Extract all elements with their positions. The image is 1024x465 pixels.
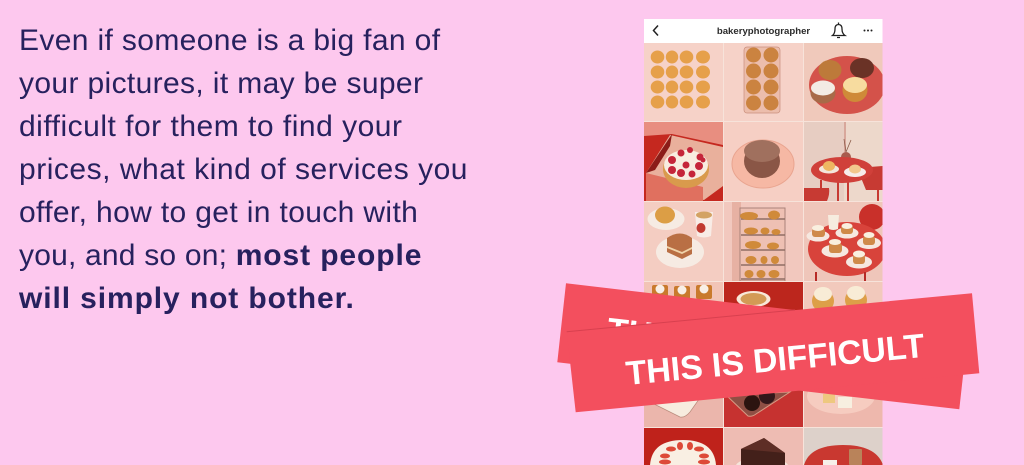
- photo: sliced roll on plate: [804, 391, 882, 427]
- grid gaps: [740, 281, 786, 282]
- photo: two cream cakes: [804, 282, 882, 310]
- icon: back chevron: [654, 26, 658, 36]
- photo: cupcakes row: [644, 282, 723, 302]
- profile name: bakeryphotographer: [717, 26, 810, 37]
- icon: more dots: [864, 30, 872, 32]
- photo: sixteen buns: [644, 43, 723, 121]
- photo: pastries on rack: [724, 202, 803, 281]
- photo: chocolates on tray: [724, 390, 803, 427]
- photo: buns in tray: [724, 43, 803, 121]
- text block: explanation paragraph: difficult for them to find your: [19, 110, 402, 143]
- front banner: this is difficult: [567, 293, 979, 412]
- icon: bell: [832, 22, 845, 38]
- text block: explanation paragraph: [18, 24, 468, 315]
- photo: four cakes on red plate: [804, 43, 885, 121]
- back banner: this is difficult: THIS IS DIFF: [605, 311, 812, 373]
- photo: strawberry tart in box: [644, 122, 723, 201]
- photo: chocolate cake slice: [724, 428, 803, 465]
- photo: cakes on red table: [804, 202, 886, 281]
- banner label: THIS IS DIFFICULT: [624, 327, 927, 393]
- photo: chocolate cake on plate: [724, 122, 803, 201]
- photo: cakes and cup: [644, 202, 723, 281]
- text block: explanation paragraph: prices, what kind of services you: [19, 153, 468, 186]
- text block: explanation paragraph: your pictures, it may be super: [19, 67, 423, 100]
- text block: explanation paragraph: will simply not bother.: [19, 282, 355, 315]
- photo grid: [644, 43, 886, 465]
- phone header bar: [644, 19, 882, 43]
- photo: strawberry cake on red: [644, 428, 723, 465]
- photo: red table with cakes: [804, 122, 883, 201]
- back banner: this is difficult: [557, 283, 968, 409]
- text block: explanation paragraph: Even if someone is a big fan of: [19, 24, 440, 57]
- text block: explanation paragraph: you, and so on; most people: [19, 239, 422, 272]
- photo: white tray: [644, 398, 723, 427]
- photo: red table with coffee: [804, 428, 883, 465]
- photo: latte on red: [724, 282, 803, 310]
- text block: explanation paragraph: offer, how to get in touch with: [19, 196, 418, 229]
- phone screenshot: profile grid: [644, 19, 886, 465]
